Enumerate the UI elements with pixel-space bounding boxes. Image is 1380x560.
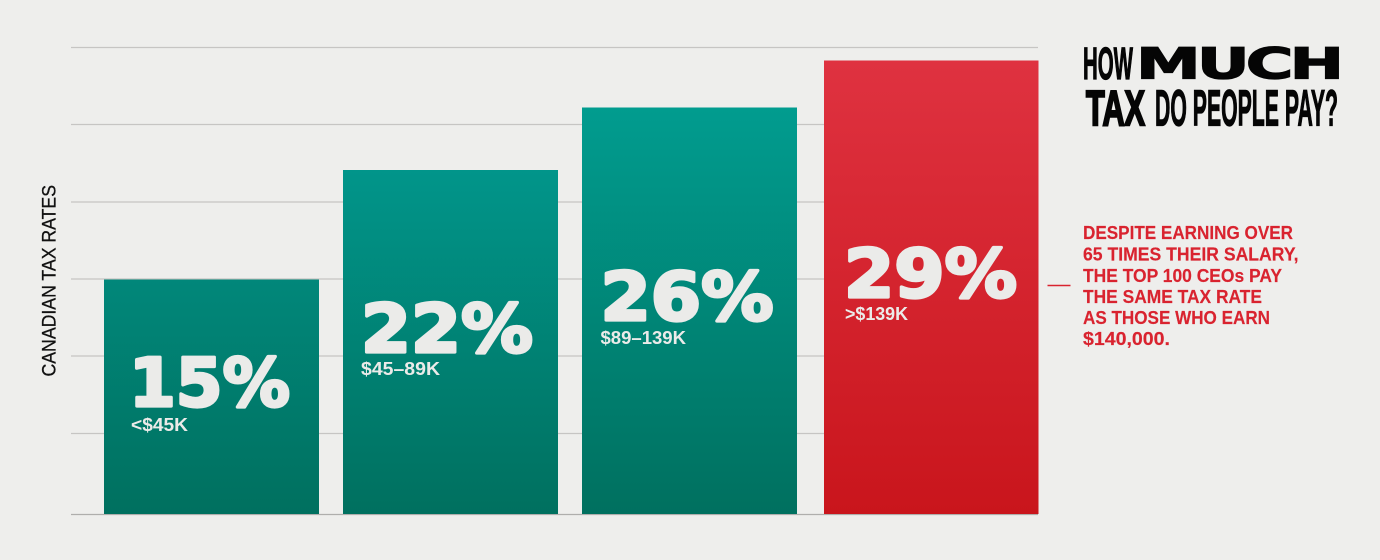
callout text: THE SAME TAX RATE [1083,286,1262,307]
bar: 15% under $45K [104,280,319,514]
bracket label: $89-139K: $89–139K [600,327,687,348]
callout text [1083,222,1298,349]
callout text: DESPITE EARNING OVER [1083,222,1293,243]
callout text: 65 TIMES THEIR SALARY, [1083,244,1298,264]
bar: 29% over $139K [824,60,1038,514]
value: 22%: 22% [361,290,533,368]
value: 29%: 29% [844,235,1017,313]
value: 26%: 26% [600,258,774,336]
bar: 26% $89-139K [582,108,797,514]
title: How much tax do people pay?: MUCH [1136,39,1340,88]
title: How much tax do people pay?: HOW [1083,38,1133,89]
callout text: AS THOSE WHO EARN [1083,307,1270,328]
callout text: THE TOP 100 CEOs PAY [1083,265,1282,286]
bracket label: under $45K: <$45K [131,414,189,435]
title: How much tax do people pay? [1083,38,1340,136]
title: How much tax do people pay?: TAX [1086,82,1145,136]
axis label: Canadian tax rates: CANADIAN TAX RATES [40,185,60,376]
bracket label: $45-89K: $45–89K [361,358,441,379]
bar: 22% $45-89K [343,170,558,514]
value: 15%: 15% [129,344,290,422]
callout text: $140,000. [1083,328,1170,349]
callout connector [1048,284,1070,286]
bracket label: over $139K: >$139K [845,303,909,324]
